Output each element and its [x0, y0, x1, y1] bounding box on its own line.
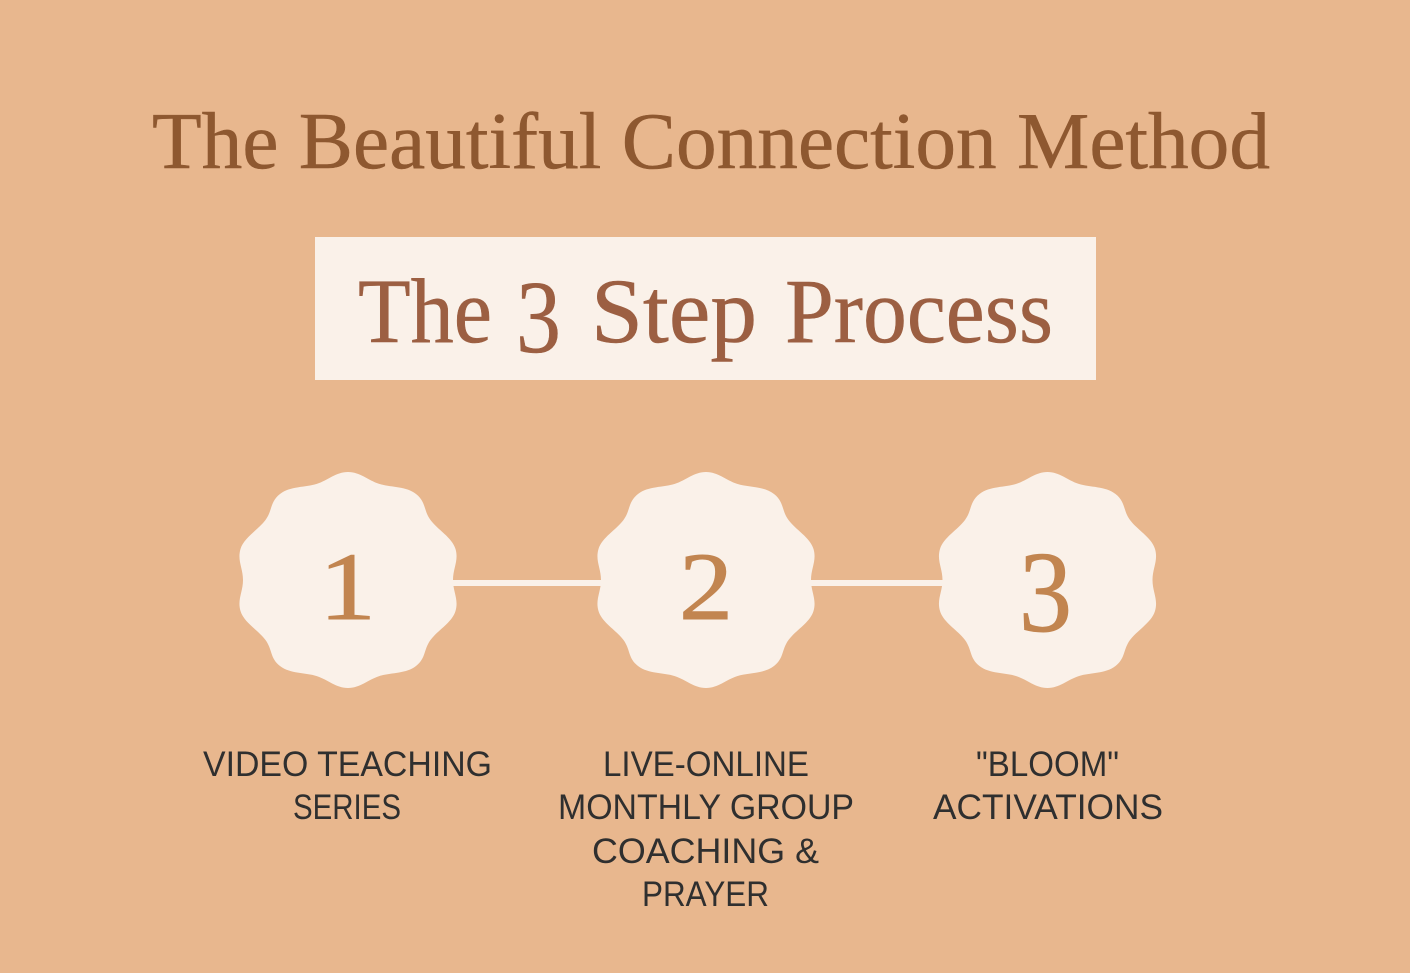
step 2 label	[558, 745, 854, 914]
heading: the 3 step process: 3	[516, 260, 561, 375]
heading: the 3 step process: The	[358, 260, 492, 362]
step 2 label: MONTHLY GROUP	[558, 788, 854, 827]
step 3 label: "BLOOM"	[976, 745, 1119, 784]
step 3 label: ACTIVATIONS	[933, 788, 1163, 827]
step 2 badge	[597, 472, 815, 688]
connector line	[450, 580, 945, 586]
step 2 label: PRAYER	[642, 875, 769, 914]
title: The Beautiful Connection Method	[152, 98, 1270, 186]
step 2 label: COACHING &	[592, 832, 819, 871]
step 2 label: LIVE-ONLINE	[603, 745, 809, 784]
panel: subtitle banner	[315, 237, 1096, 380]
step 3 label	[933, 745, 1163, 827]
step 3 badge	[939, 472, 1156, 688]
heading: the 3 step process: Step	[591, 260, 757, 362]
step 1 label	[203, 745, 492, 827]
step 1 label: VIDEO TEACHING	[203, 745, 492, 784]
step 1 badge	[239, 472, 457, 688]
number 2: 2	[679, 533, 733, 640]
step 1 label: SERIES	[293, 788, 401, 827]
heading: the 3 step process	[358, 260, 1053, 375]
number 3: 3	[1019, 529, 1072, 657]
heading: the 3 step process: Process	[785, 260, 1053, 362]
number 1: 1	[319, 533, 376, 640]
